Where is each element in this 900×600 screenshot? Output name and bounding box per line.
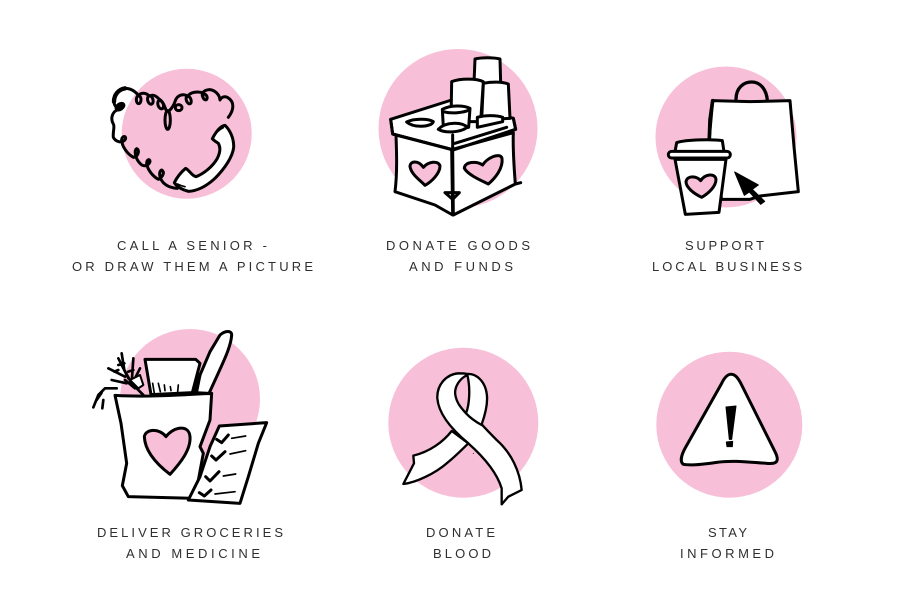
- label: support local business: LOCAL BUSINESS: [652, 259, 802, 274]
- label: call a senior: CALL A SENIOR -: [117, 238, 267, 253]
- label: support local business: [652, 238, 802, 274]
- pink circle: [656, 352, 802, 498]
- label: call a senior: OR DRAW THEM A PICTURE: [72, 259, 313, 274]
- label: deliver groceries and medicine: AND MEDICINE: [126, 546, 260, 561]
- icon: donation box with cans: [391, 58, 521, 215]
- pink circle: [378, 49, 538, 208]
- panel: call a senior: [112, 69, 252, 199]
- label: donate blood: BLOOD: [433, 546, 491, 561]
- label: stay informed: STAY: [708, 525, 747, 540]
- label: stay informed: [680, 525, 774, 561]
- pink circle: [656, 66, 796, 208]
- icon: warning triangle: [681, 374, 777, 465]
- label: stay informed: INFORMED: [680, 546, 774, 561]
- panel: donate blood: [388, 348, 538, 504]
- panel: donate goods and funds: [378, 49, 538, 215]
- label: support local business: SUPPORT: [685, 238, 764, 253]
- panel: support local business: [656, 66, 798, 214]
- pink circle: [120, 329, 260, 469]
- label: donate goods and funds: [386, 238, 530, 274]
- pink circle: [388, 348, 538, 498]
- panel: stay informed: [656, 352, 802, 498]
- label: call a senior: [72, 238, 313, 274]
- label: deliver groceries and medicine: [97, 525, 283, 561]
- icon: shopping bag, coffee cup and cursor: [668, 82, 798, 214]
- icon: grocery bag with shopping list: [93, 331, 267, 503]
- label: donate blood: DONATE: [426, 525, 495, 540]
- label: donate blood: [426, 525, 495, 561]
- label: donate goods and funds: AND FUNDS: [409, 259, 513, 274]
- label: donate goods and funds: DONATE GOODS: [386, 238, 530, 253]
- label: deliver groceries and medicine: DELIVER GROCERIES: [97, 525, 283, 540]
- icon: awareness ribbon: [403, 373, 522, 504]
- panel: deliver groceries and medicine: [93, 329, 267, 503]
- icon: telephone with heart-shaped cord: [112, 88, 234, 191]
- pink circle: [122, 69, 252, 199]
